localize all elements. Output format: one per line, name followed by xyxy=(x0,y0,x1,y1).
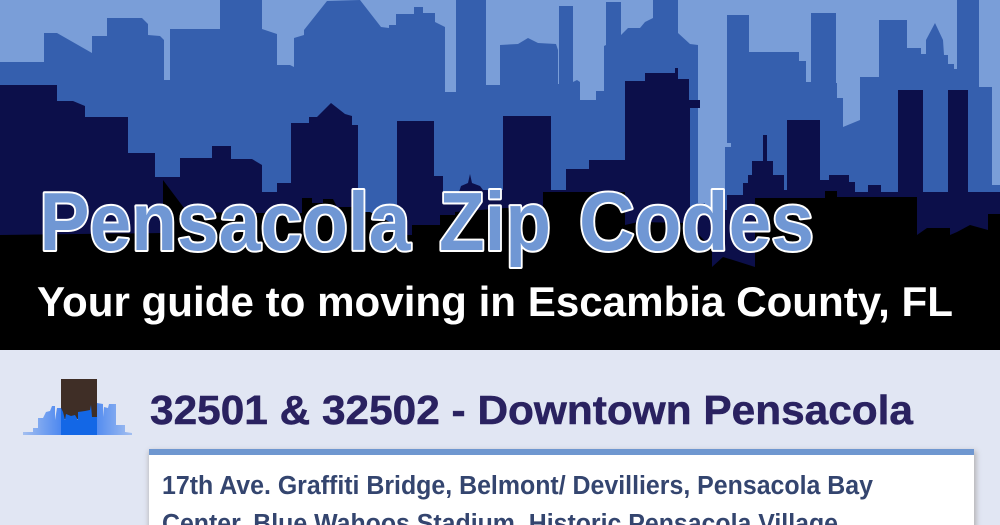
skyline: black foreground xyxy=(0,180,1000,350)
subtitle: Your guide to moving in Escambia County, FL xyxy=(37,278,953,325)
title: Pensacola xyxy=(40,175,411,268)
title: Codes xyxy=(579,175,814,268)
panel: area description card xyxy=(149,449,976,525)
header skyline banner xyxy=(0,0,1000,350)
heading: zip code area: 32501 & 32502 - Downtown Pensacola xyxy=(150,387,914,433)
title xyxy=(40,175,814,268)
title: Zip xyxy=(439,175,551,268)
card text: line 1: 17th Ave. Graffiti Bridge, Belmont/ Devilliers, Pensacola Bay xyxy=(162,472,874,500)
skyline: mid blue layer xyxy=(0,0,1000,350)
icon: downtown skyline xyxy=(23,379,132,435)
skyline: dark navy layer xyxy=(0,68,1000,350)
